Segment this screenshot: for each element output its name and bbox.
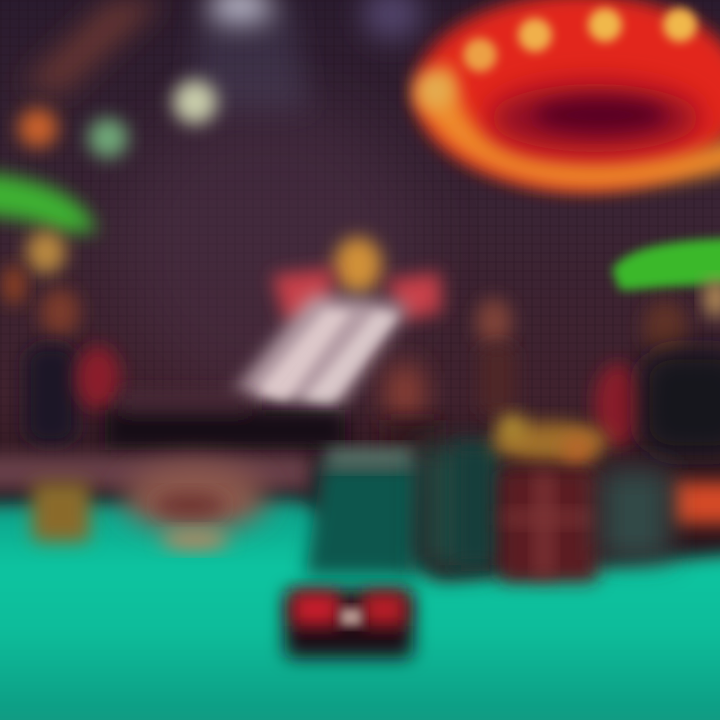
plates and chips left — [123, 464, 267, 550]
teal card box — [305, 448, 420, 575]
red card pack foreground — [285, 590, 413, 658]
teal boxes right of center — [420, 445, 495, 570]
table rim band — [0, 444, 317, 497]
red gift boxes — [500, 470, 598, 582]
green shade left — [0, 161, 106, 246]
green felt floor — [0, 500, 720, 720]
right-center figure — [476, 298, 515, 415]
green shade right — [606, 231, 720, 298]
red neon lamp — [399, 0, 720, 206]
right figures — [584, 270, 720, 538]
dark table — [105, 392, 345, 450]
left figures — [2, 230, 120, 445]
dark teal box right — [600, 470, 670, 560]
ceiling spotlights — [188, 0, 433, 114]
string lights — [18, 80, 217, 158]
diagonal beam top left — [22, 0, 164, 104]
center figure — [385, 362, 440, 460]
gold chip pile — [492, 414, 608, 466]
gold cup on table — [32, 482, 90, 542]
central king figure and cards — [232, 237, 442, 412]
